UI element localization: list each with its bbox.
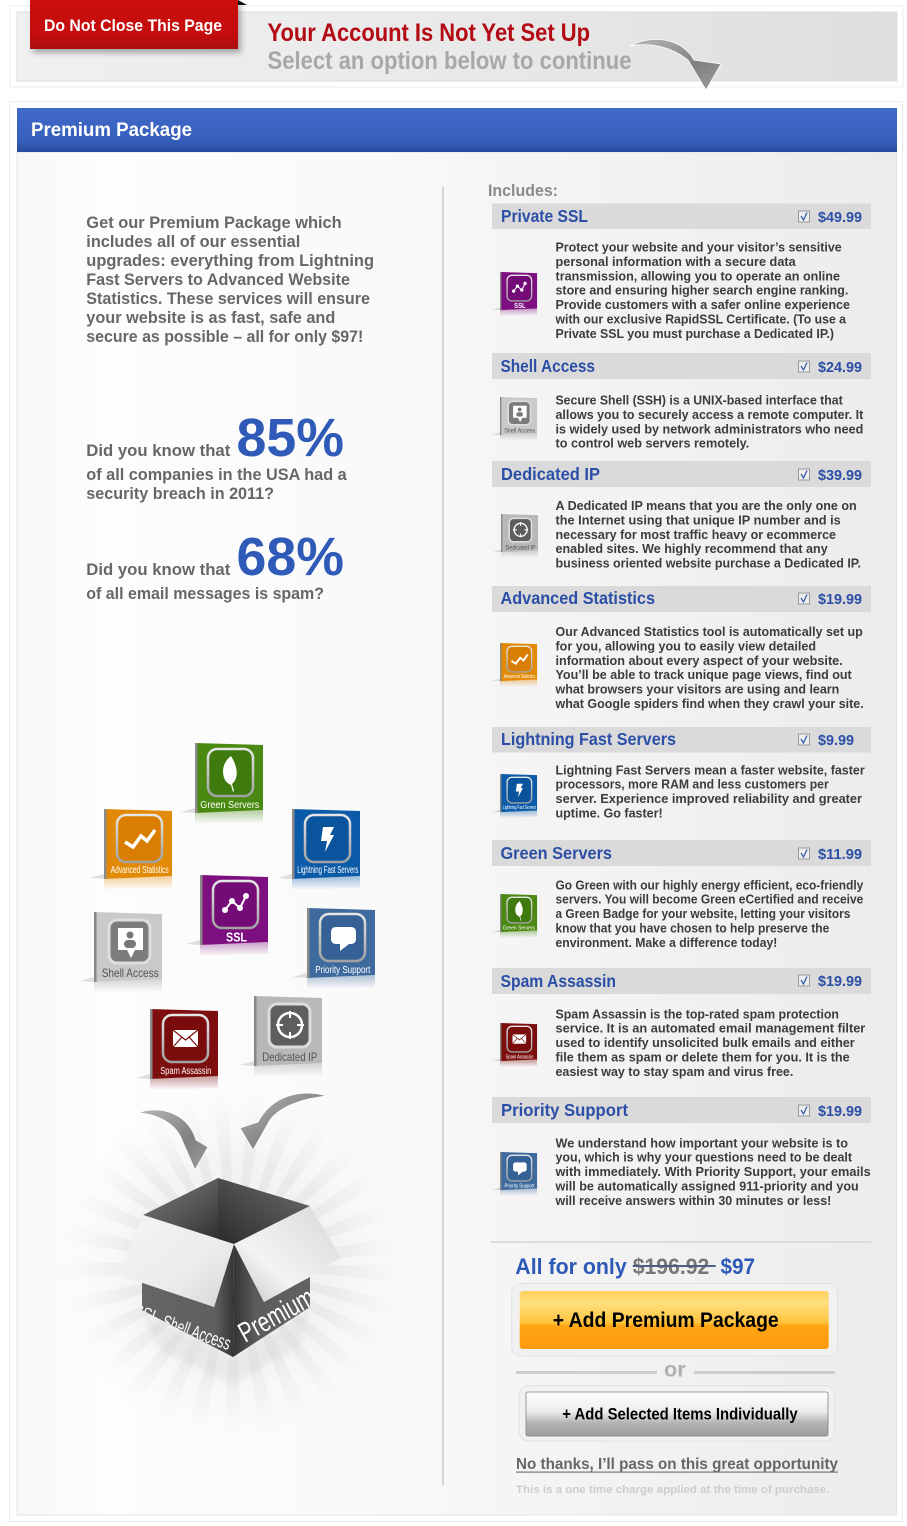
description: spam assassin (556, 1007, 865, 1079)
button: add selected items individually: + Add Selected Items Individually (562, 1406, 798, 1424)
text block: package intro: Get our Premium Package which (86, 213, 342, 232)
icon: lightning fast servers large (278, 809, 360, 890)
description: shell access: to control web servers remotely. (556, 437, 749, 451)
divider: or: or (664, 1358, 686, 1382)
description: advanced statistics: for you, allowing you to easily view detailed (556, 639, 816, 653)
price line: $196.92 (633, 1254, 709, 1279)
description: advanced statistics: what browsers your visitors are using and learn (555, 683, 839, 697)
icon: shell access small: Shell Access (504, 427, 536, 434)
description: green servers: a Green Badge for your website, letting your visitors (556, 907, 850, 921)
icon: dedicated ip small (493, 514, 538, 558)
item: dedicated ip: $39.99 (818, 467, 862, 484)
item: green servers (492, 840, 871, 950)
arrow: right into box (240, 1093, 327, 1150)
description: spam assassin: service. It is an automated email management filter (556, 1022, 865, 1036)
stat: 85 percent: Did you know that (86, 441, 231, 460)
price line (515, 1254, 755, 1279)
description: shell access: Secure Shell (SSH) is a UNIX-based interface that (556, 394, 843, 408)
button: add premium package (512, 1284, 838, 1356)
icon: lightning fast servers small: Lightning Fast Servers (503, 805, 536, 811)
item: lightning fast servers (492, 727, 871, 820)
icon: advanced statistics small (492, 643, 537, 687)
description: private ssl: transmission, allowing you to operate an online (556, 269, 840, 283)
icon: green servers small: Green Servers (503, 925, 535, 931)
icon: shell access large (80, 912, 162, 993)
icon: advanced statistics large (90, 809, 172, 890)
description: lightning fast servers: server. Experience improved reliability and greater (556, 792, 862, 806)
sunburst behind box (59, 1090, 409, 1440)
icon: advanced statistics large: Advanced Statistics (111, 865, 169, 876)
description: shell access: is widely used by network administrators who need (556, 422, 863, 436)
icon: spam assassin small: Spam Assassin (506, 1054, 533, 1060)
text block: package intro: Fast Servers to Advanced Website (86, 270, 350, 289)
description: green servers (556, 878, 863, 950)
description: private ssl (555, 240, 850, 341)
item: lightning fast servers: Lightning Fast Servers (501, 729, 676, 749)
price line: $97 (720, 1254, 755, 1279)
button: add premium package: + Add Premium Package (553, 1309, 779, 1332)
price line: All for only (515, 1254, 627, 1279)
item: advanced statistics (492, 586, 871, 711)
description: dedicated ip: the Internet using that unique IP number and is (556, 513, 841, 527)
description: priority support: will be automatically assigned 911-priority and you (555, 1180, 859, 1194)
description: private ssl: Protect your website and your visitor’s sensitive (556, 240, 842, 254)
icon: green servers large (181, 743, 263, 824)
link: no thanks: No thanks, I’ll pass on this great opportunity (516, 1456, 838, 1473)
icon: priority support small: Priority Support (505, 1183, 535, 1189)
item: shell access (492, 353, 871, 451)
description: spam assassin: file them as spam or delete them for you. It is the (556, 1050, 850, 1064)
button: add selected items individually (519, 1386, 834, 1441)
stat: 68 percent: 68% (236, 527, 344, 587)
stat: 68 percent: Did you know that (86, 560, 231, 579)
description: lightning fast servers (556, 763, 865, 820)
item: shell access: Shell Access (500, 356, 595, 376)
description: advanced statistics: information about every aspect of your website. (556, 654, 843, 668)
description: green servers: know that you have chosen to help preserve the (556, 922, 829, 936)
item: dedicated ip: Dedicated IP (501, 464, 600, 484)
icon: shell access small (492, 397, 537, 441)
icon: ssl large (186, 875, 268, 956)
icon: green servers large: Green Servers (200, 800, 259, 811)
description: advanced statistics: You’ll be able to track unique page views, find out (556, 668, 853, 682)
stat: 85 percent (86, 408, 347, 503)
icon: dedicated ip large: Dedicated IP (262, 1050, 317, 1064)
box label: shell access (142, 1306, 230, 1350)
item: shell access: $24.99 (818, 359, 862, 376)
icon: lightning fast servers large: Lightning Fast Servers (297, 865, 358, 876)
icon: shell access large: Shell Access (102, 966, 159, 980)
icon: priority support large (293, 908, 375, 989)
icon: dedicated ip large (240, 996, 322, 1077)
description: private ssl: Provide customers with a safer online experience (556, 298, 850, 312)
item: spam assassin: Spam Assassin (500, 971, 616, 991)
arrow: left into box (138, 1110, 208, 1170)
icon: priority support small (492, 1152, 537, 1196)
stat: 85 percent: security breach in 2011? (86, 484, 274, 503)
description: spam assassin: easiest way to stay spam and virus free. (556, 1065, 793, 1079)
heading: premium package: Premium Package (31, 120, 192, 141)
description: private ssl: with our exclusive RapidSSL Certificate. (To use a (555, 312, 847, 326)
item: private ssl: $49.99 (818, 209, 862, 226)
description: dedicated ip: enabled sites. We highly recommend that any (556, 542, 828, 556)
description: green servers: Go Green with our highly energy efficient, eco-friendly (556, 878, 863, 892)
icon: priority support large: Priority Support (315, 965, 370, 976)
description: shell access (556, 394, 864, 451)
description: green servers: environment. Make a difference today! (556, 936, 777, 950)
item: priority support: $19.99 (818, 1103, 862, 1120)
red tab: do not close (30, 0, 238, 49)
description: private ssl: Private SSL you must purchase a Dedicated IP.) (556, 327, 834, 341)
item: spam assassin (492, 968, 871, 1079)
item: private ssl: Private SSL (501, 206, 588, 226)
text block: package intro: your website is as fast, safe and (86, 308, 335, 327)
item: dedicated ip (492, 461, 871, 571)
stat: 68 percent: of all email messages is spam? (86, 584, 324, 603)
description: priority support: you, which is why your questions need to be dealt (556, 1151, 853, 1165)
description: dedicated ip: necessary for most traffic heavy or ecommerce (556, 528, 836, 542)
description: private ssl: personal information with a secure data (556, 255, 797, 269)
icon: ssl large: SSL (226, 930, 247, 944)
description: green servers: servers. You will become Green eCertified and receive (556, 893, 863, 907)
stat: 85 percent: 85% (236, 408, 344, 468)
divider: or (516, 1358, 835, 1382)
box label: shell access: Shell Access (159, 1312, 233, 1355)
description: priority support (554, 1136, 871, 1208)
illustration: open premium box (142, 1178, 341, 1380)
heading: account not set up: Your Account Is Not Yet Set Up (268, 19, 590, 47)
icon: dedicated ip small: Dedicated IP (506, 544, 536, 551)
description: priority support: We understand how important your website is to (556, 1136, 848, 1150)
item: advanced statistics: Advanced Statistics (500, 588, 655, 608)
icon: ssl small (492, 272, 537, 316)
icon: ssl small: SSL (514, 302, 526, 310)
item: green servers: $11.99 (818, 846, 862, 863)
box label: premium: Premium (233, 1281, 320, 1348)
icon: spam assassin large: Spam Assassin (160, 1066, 211, 1077)
text block: package intro (86, 213, 374, 346)
description: private ssl: store and ensuring higher search engine ranking. (556, 284, 848, 298)
item: lightning fast servers: $9.99 (818, 732, 854, 749)
description: lightning fast servers: processors, more RAM and less customers per (556, 778, 829, 792)
description: lightning fast servers: Lightning Fast Servers mean a faster website, faster (556, 763, 865, 777)
description: priority support: with immediately. With Priority Support, your emails (554, 1165, 871, 1179)
item: spam assassin: $19.99 (818, 973, 862, 990)
arrow: pointing down to options (630, 39, 721, 90)
subheading: select an option: Select an option below to continue (268, 47, 632, 75)
description: priority support: will receive answers within 30 minutes or less! (555, 1194, 831, 1208)
item: advanced statistics: $19.99 (818, 591, 862, 608)
description: lightning fast servers: uptime. Go faster! (556, 806, 663, 820)
description: dedicated ip (556, 499, 861, 571)
description: spam assassin: used to identify unsolicited bulk emails and either (556, 1036, 855, 1050)
text block: package intro: includes all of our essential (86, 232, 300, 251)
icon: spam assassin large (136, 1009, 218, 1090)
description: spam assassin: Spam Assassin is the top-rated spam protection (556, 1007, 839, 1021)
description: advanced statistics: Our Advanced Statistics tool is automatically set up (556, 625, 863, 639)
text block: package intro: secure as possible – all for only $97! (86, 327, 363, 346)
icon: lightning fast servers small (492, 774, 537, 818)
stat: 85 percent: of all companies in the USA had a (86, 465, 347, 484)
icon: spam assassin small (492, 1023, 537, 1067)
panel: account notice (10, 0, 903, 90)
description: shell access: allows you to securely access a remote computer. It (556, 408, 864, 422)
description: advanced statistics: what Google spiders find when they crawl your site. (555, 697, 864, 711)
description: advanced statistics (555, 625, 864, 711)
icon: advanced statistics small: Advanced Statistics (504, 674, 535, 680)
item: priority support: Priority Support (501, 1100, 628, 1120)
item: priority support (492, 1097, 871, 1208)
stat: 68 percent (86, 527, 344, 603)
text block: package intro: Statistics. These services will ensure (86, 289, 370, 308)
description: dedicated ip: business oriented website purchase a Dedicated IP. (556, 557, 861, 571)
text block: package intro: upgrades: everything from Lightning (86, 251, 374, 270)
item: private ssl (492, 204, 871, 341)
box label: shell access: SSL (130, 1301, 162, 1329)
item: green servers: Green Servers (500, 843, 612, 863)
note: one time charge: This is a one time charge applied at the time of purchase. (516, 1484, 829, 1496)
icon: green servers small (492, 894, 537, 938)
heading: includes: Includes: (488, 182, 558, 200)
red tab: do not close: Do Not Close This Page (44, 16, 222, 35)
description: dedicated ip: A Dedicated IP means that you are the only one on (556, 499, 857, 513)
